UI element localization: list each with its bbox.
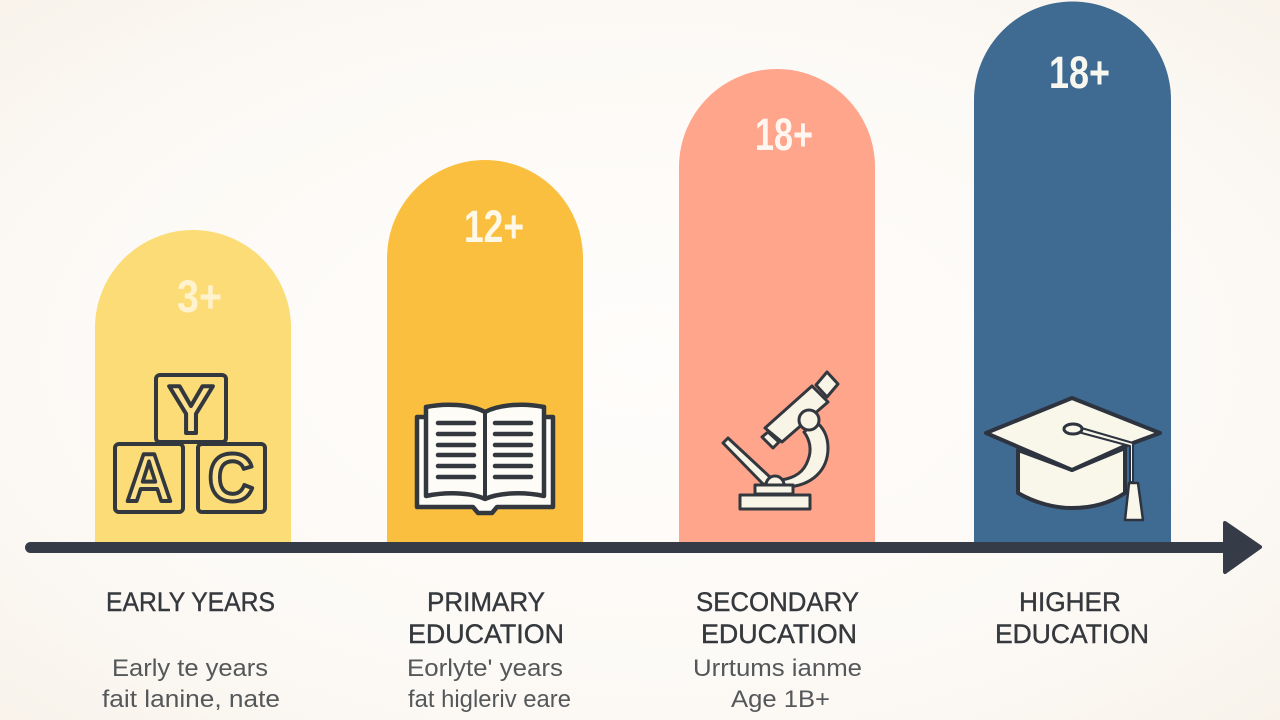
label: primary education [407,587,571,713]
description: secondary education: Urrtums ianme [693,655,862,682]
heading: primary education: PRIMARY [427,587,545,617]
description: early years: fait lanine, nate [102,686,280,713]
heading: early years: EARLY YEARS [106,587,275,617]
icon: alphabet blocks [115,372,265,516]
heading: secondary education: SECONDARY [696,587,859,617]
age label: 12+: 12+ [464,201,524,252]
panel: early years bar [95,230,291,545]
age label: 18+: 18+ [1049,47,1110,98]
label: higher education [995,587,1149,649]
icon: microscope [723,372,838,509]
icon: graduation cap [986,398,1160,520]
age label: 3+: 3+ [177,271,222,322]
icon: open book [417,405,553,513]
icon: alphabet blocks: A [126,440,172,516]
timeline arrow [25,523,1260,572]
panel: primary education bar [387,160,583,545]
description: primary education: fat higleriv eare [408,686,571,713]
icon: alphabet blocks: Y [168,372,214,448]
description: early years: Early te years [112,655,268,682]
description: secondary education: Age 1B+ [731,686,830,713]
label: secondary education [693,587,862,713]
age label: 18+: 18+ [755,109,813,160]
icon: alphabet blocks: C [208,440,254,516]
label: early years [102,587,280,713]
heading: primary education: EDUCATION [408,619,564,649]
description: primary education: Eorlyte' years [407,655,563,682]
panel: secondary education bar [679,69,875,545]
heading: higher education: EDUCATION [995,619,1149,649]
heading: higher education: HIGHER [1019,587,1121,617]
heading: secondary education: EDUCATION [701,619,857,649]
panel: higher education bar [974,1,1171,545]
